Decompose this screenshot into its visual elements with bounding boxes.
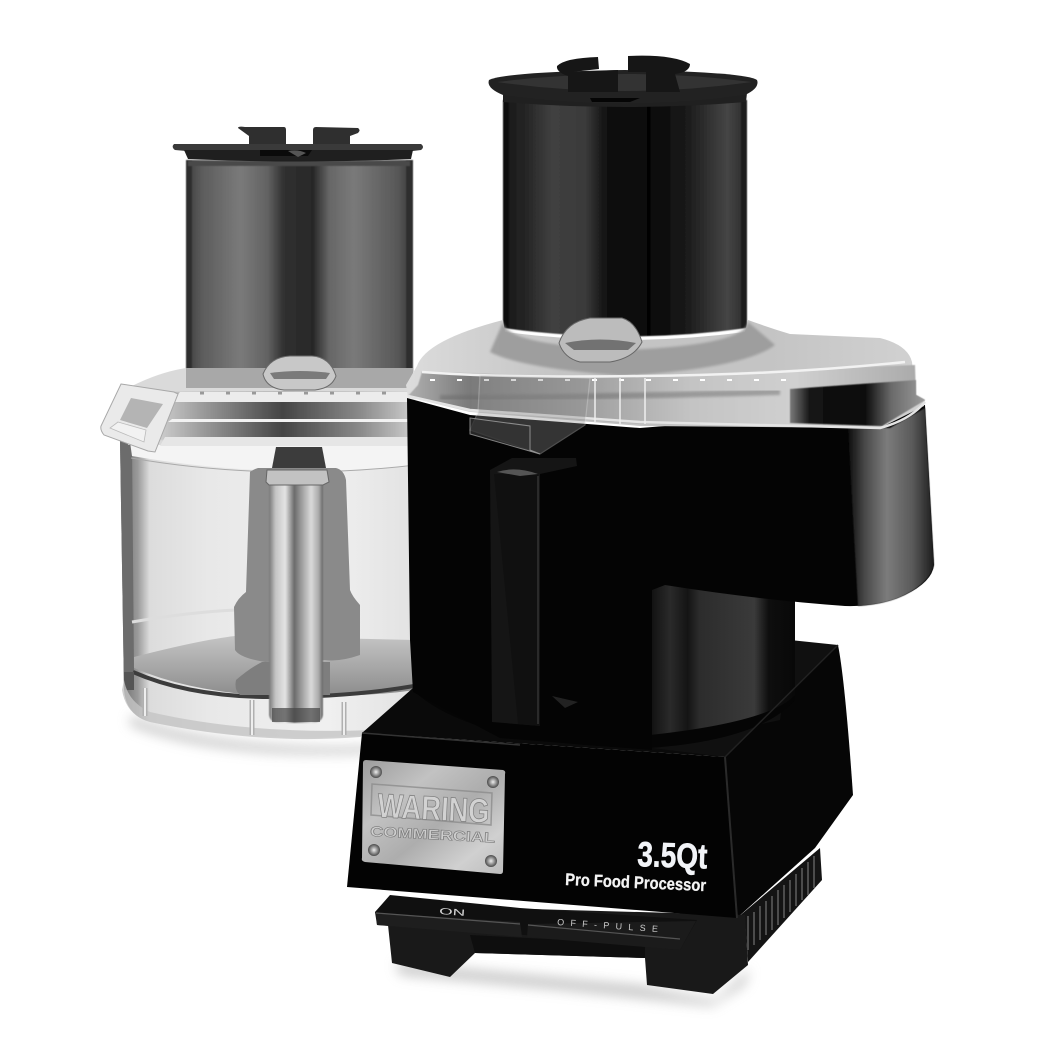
front unit: base side and vents: [362, 640, 853, 962]
front unit: housing side highlight: [848, 408, 934, 606]
front unit: feet: [388, 905, 748, 994]
nameplate: Waring Commercial: [362, 760, 505, 874]
front unit: tube lid with tabs: [489, 56, 758, 107]
floor shadow: [130, 715, 750, 1006]
back unit: tube lid with tabs: [173, 127, 423, 162]
back unit: feed tube: [186, 160, 413, 382]
ON label: ON: [439, 906, 465, 918]
front unit: base front face: [347, 645, 838, 918]
front unit: bowl handle: [490, 458, 578, 726]
front unit: feed tube: [503, 100, 747, 336]
back unit: centre steel shaft: [269, 483, 323, 723]
capacity label: 3.5Qt: 3.5Qt: [637, 835, 708, 876]
nameplate: WARING wordmark: WARING: [377, 787, 490, 831]
front unit: base top surface: [362, 688, 725, 757]
front unit: lid bump: [559, 318, 642, 362]
back unit: handle latch: [101, 384, 178, 452]
front unit: clear lid: [406, 318, 925, 454]
back unit: lid bump: [263, 356, 336, 390]
front unit: dark window through lid: [790, 380, 925, 426]
back unit: clear lid: [101, 356, 415, 452]
front unit: lower bowl: [412, 560, 795, 748]
back unit: blade hub silhouette: [234, 468, 360, 662]
OFF-PULSE label: OFF-PULSE: [557, 917, 658, 934]
back unit: glass bowl: [120, 440, 416, 739]
front unit: motor housing: [407, 398, 934, 750]
front unit: control buttons: [375, 895, 697, 950]
front food processor: [347, 56, 934, 994]
back food processor: bowl and lid assembly: [101, 127, 423, 739]
nameplate: COMMERCIAL wordmark: COMMERCIAL: [370, 823, 496, 846]
product label: Pro Food Processor: Pro Food Processor: [565, 870, 707, 895]
